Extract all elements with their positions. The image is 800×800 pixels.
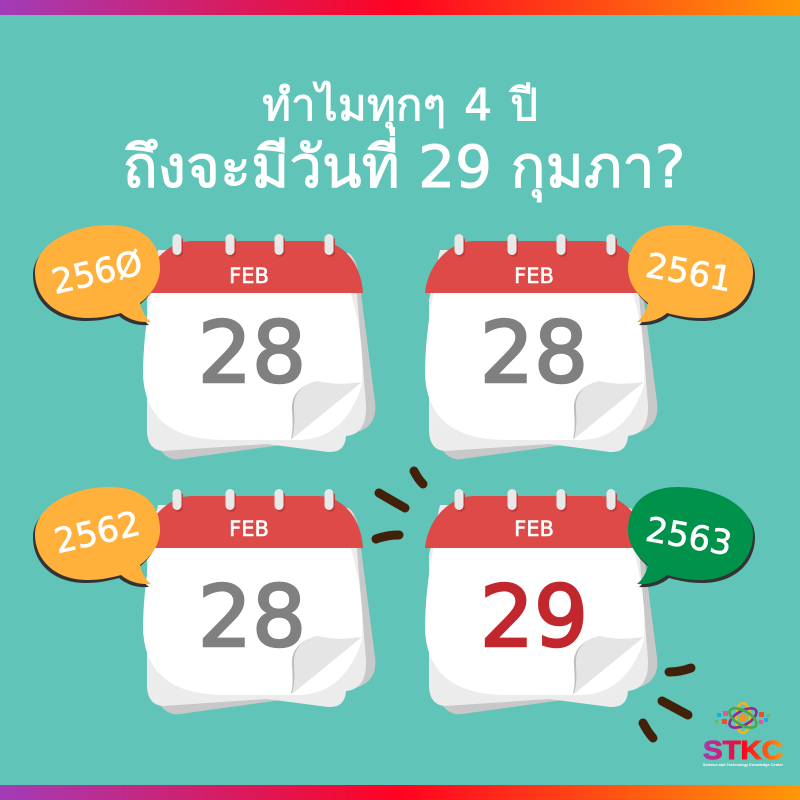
date number: 29 — [480, 568, 588, 667]
speech bubble: 2561: 2561 — [643, 246, 735, 300]
emphasis dashes: upper left of highlighted calendar — [376, 471, 423, 539]
logo wordmark: STKC — [703, 735, 783, 765]
calendar: top right — [425, 234, 657, 459]
date number: 28 — [198, 568, 306, 667]
month label: FEB — [229, 517, 269, 541]
calendar: top left — [143, 234, 375, 459]
speech bubble: 2561 — [628, 225, 755, 325]
bottom gradient bar — [0, 785, 800, 800]
speech bubble: 2560: 256Ø — [48, 243, 146, 303]
title line 2: ถึงจะมีวันที่ 29 กุมภา? — [123, 127, 685, 203]
logo: STKC — [703, 703, 783, 767]
speech bubble: 2560 — [33, 225, 160, 325]
title — [123, 80, 685, 203]
speech bubble: 2562: 2562 — [51, 504, 144, 562]
speech bubble: 2563 — [628, 487, 755, 587]
month label: FEB — [514, 264, 554, 288]
date number: 28 — [480, 304, 588, 403]
month label: FEB — [514, 517, 554, 541]
calendar: bottom right, highlighted — [425, 489, 657, 714]
top gradient bar — [0, 0, 800, 15]
emphasis dashes: lower right of highlighted calendar — [643, 668, 691, 738]
speech bubble: 2563: 2563 — [643, 510, 735, 564]
logo tagline: Science and Technology Knowledge Center — [703, 762, 783, 767]
month label: FEB — [229, 264, 269, 288]
calendar: bottom left — [143, 489, 375, 714]
speech bubble: 2562 — [33, 487, 160, 587]
title line 1: ทำไมทุกๆ 4 ปี — [262, 80, 538, 132]
date number: 28 — [198, 304, 306, 403]
icon: atom — [715, 703, 770, 733]
